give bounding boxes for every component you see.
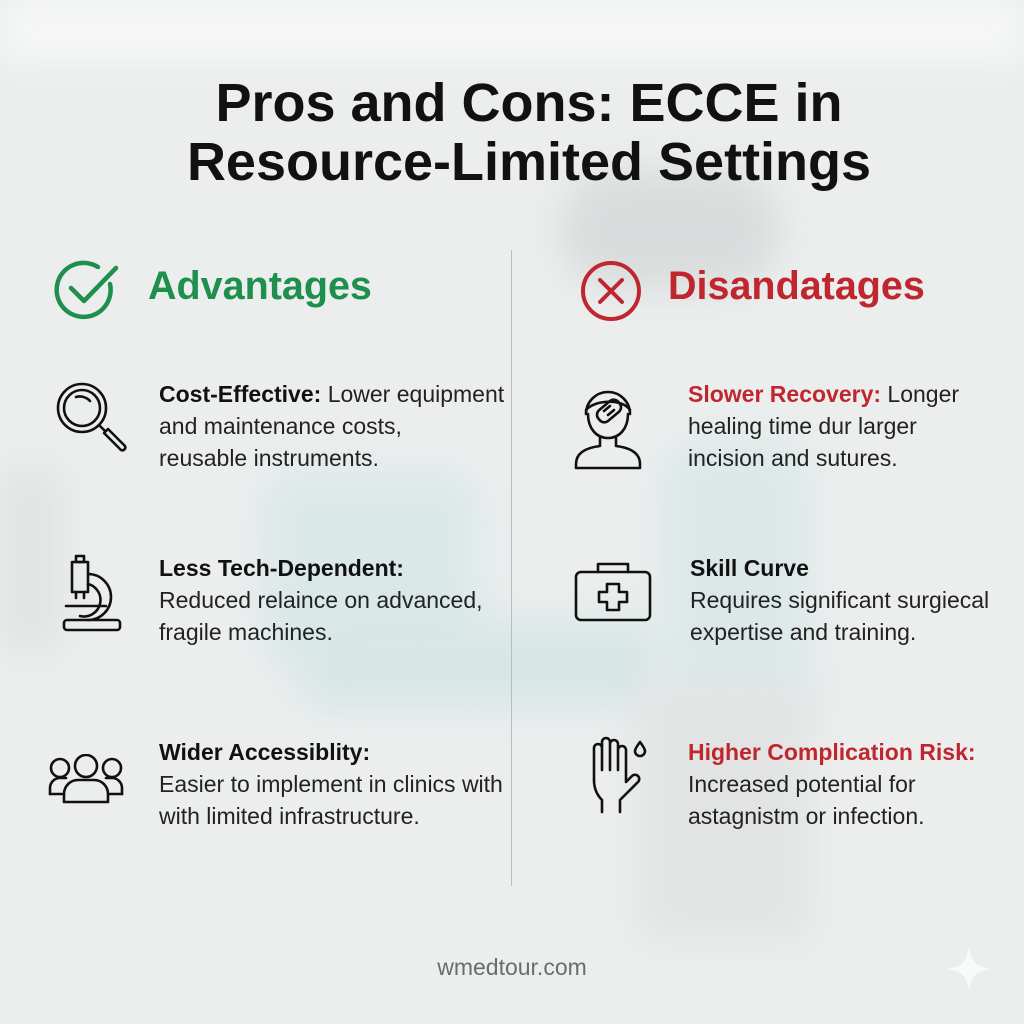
title: Resource-Limited Settings [187, 132, 871, 192]
item: wider accessibility [48, 739, 503, 829]
heading: disadvantages [581, 261, 925, 321]
icon: hand with drop [592, 736, 646, 814]
heading: advantages [54, 260, 372, 320]
icon: first aid kit [574, 562, 652, 622]
item: higher complication: Increased potential for [688, 771, 916, 797]
item: less tech: fragile machines. [159, 619, 333, 645]
item: skill curve [574, 555, 989, 645]
item: less tech: Reduced relaince on advanced, [159, 587, 483, 613]
item: cost-effective: Cost-Effective: Lower equipment [159, 381, 504, 407]
item: wider accessibility: Easier to implement in clinics with [159, 771, 503, 797]
item: cost-effective [56, 381, 504, 471]
item: slower recovery [574, 381, 959, 471]
item: less tech: Less Tech-Dependent: [159, 555, 404, 581]
icon: x [581, 261, 641, 321]
item: less tech [62, 554, 483, 645]
item: wider accessibility: Wider Accessiblity: [159, 739, 370, 765]
item: slower recovery: incision and sutures. [688, 445, 898, 471]
item: higher complication: Higher Complication Risk: [688, 739, 976, 765]
item: skill curve: expertise and training. [690, 619, 916, 645]
item: cost-effective: reusable instruments. [159, 445, 379, 471]
item: skill curve: Requires significant surgiecal [690, 587, 989, 613]
item: slower recovery: Slower Recovery: Longer [688, 381, 959, 407]
icon: check [54, 260, 118, 320]
item: cost-effective: and maintenance costs, [159, 413, 402, 439]
heading: disadvantages: Disandatages [668, 264, 925, 308]
icon: microscope [62, 554, 122, 632]
title: Pros and Cons: ECCE in [215, 73, 843, 133]
item: slower recovery: healing time dur larger [688, 413, 917, 439]
item: higher complication: astagnistm or infection. [688, 803, 925, 829]
title [187, 73, 871, 192]
icon: people [48, 754, 124, 804]
icon: sparkle [948, 948, 990, 990]
item: skill curve: Skill Curve [690, 555, 809, 581]
item: higher complication [592, 736, 976, 829]
item: wider accessibility: with limited infrastructure. [159, 803, 420, 829]
footer: wmedtour.com [437, 954, 587, 980]
heading: advantages: Advantages [148, 264, 372, 308]
icon: bandaged head [574, 390, 642, 470]
icon: magnifier [56, 382, 127, 452]
